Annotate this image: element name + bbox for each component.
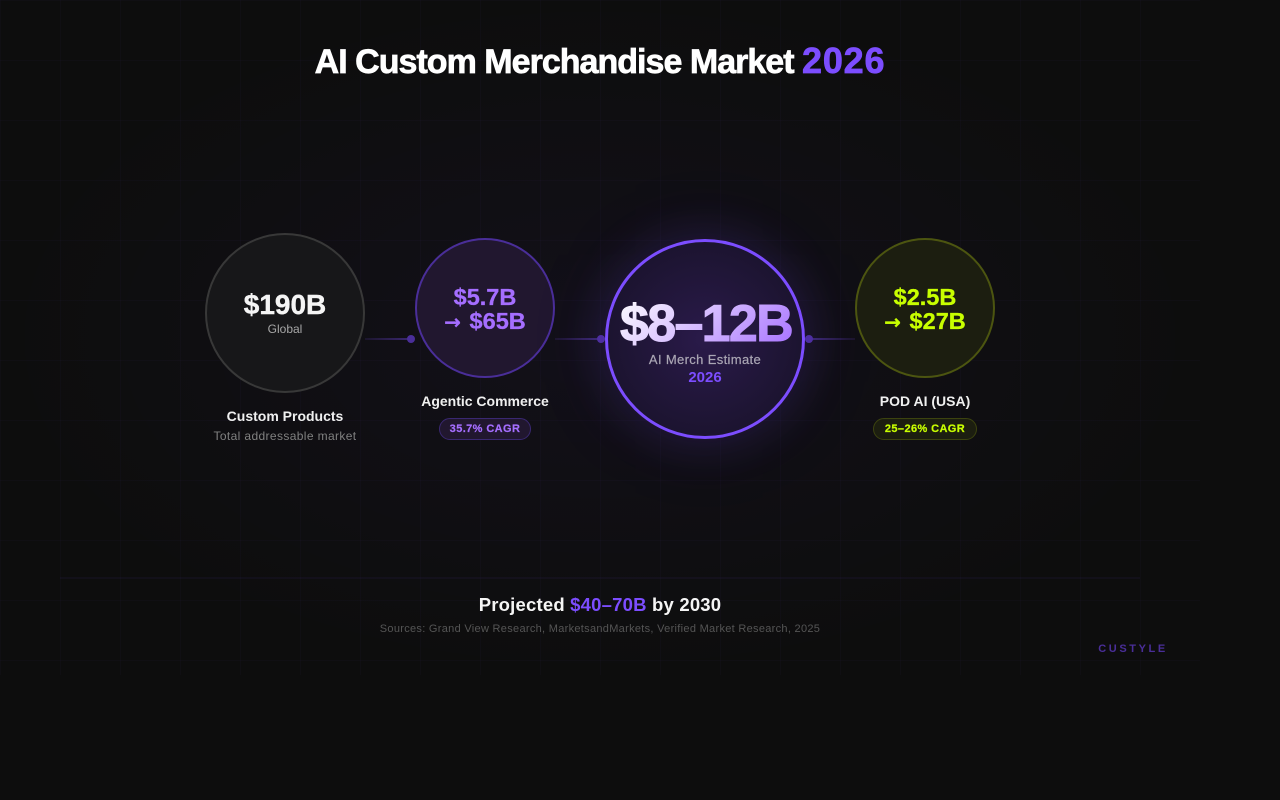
value: $2.5B to $27B: → $27B — [884, 308, 966, 334]
pill: 35.7% CAGR — [439, 418, 531, 440]
label: 2026: 2026 — [688, 369, 722, 386]
heading: custom products: Custom Products — [227, 408, 343, 424]
value: $2.5B to $27B — [884, 284, 966, 334]
divider — [60, 577, 1140, 579]
connector: custom products to agentic commerce — [365, 335, 415, 343]
value: $8–12B: $8–12B — [620, 295, 792, 353]
pill: 25–26% CAGR — [873, 418, 977, 440]
label: AI merch estimate: AI Merch Estimate — [649, 352, 761, 367]
value: $2.5B to $27B: $2.5B — [894, 284, 956, 310]
pill: 35.7% CAGR: 35.7% CAGR — [450, 423, 520, 435]
value: $5.7B to $65B: $5.7B — [454, 284, 516, 310]
value: $190B: $190B — [244, 289, 326, 320]
pill: 25–26% CAGR: 25–26% CAGR — [885, 423, 965, 435]
description: total addressable market: Total addressable market — [214, 429, 356, 443]
connector: estimate to POD AI — [805, 335, 855, 343]
connector: agentic commerce to estimate — [555, 335, 605, 343]
panel: POD AI — [855, 238, 995, 440]
footer: projection: Projected $40–70B by 2030 — [479, 594, 721, 615]
value: $5.7B to $65B: → $65B — [444, 308, 526, 334]
footer: sources: Sources: Grand View Research, MarketsandMarkets, Verified Market Research, 2025 — [380, 623, 820, 635]
heading: POD AI (USA): POD AI (USA) — [880, 393, 970, 409]
circle: custom products — [205, 233, 365, 393]
title: AI Custom Merchandise Market 2026 — [315, 40, 885, 81]
value: $5.7B to $65B — [444, 284, 526, 334]
circle: agentic commerce — [415, 238, 555, 378]
brand: CUSTYLE: CUSTYLE — [1098, 643, 1168, 655]
circle: POD AI — [855, 238, 995, 378]
heading: agentic commerce: Agentic Commerce — [421, 393, 549, 409]
panel: custom products — [205, 233, 365, 443]
label: global: Global — [268, 322, 302, 336]
panel: AI merch estimate — [582, 216, 828, 462]
panel: agentic commerce — [415, 238, 555, 440]
circle: estimate — [605, 239, 805, 439]
